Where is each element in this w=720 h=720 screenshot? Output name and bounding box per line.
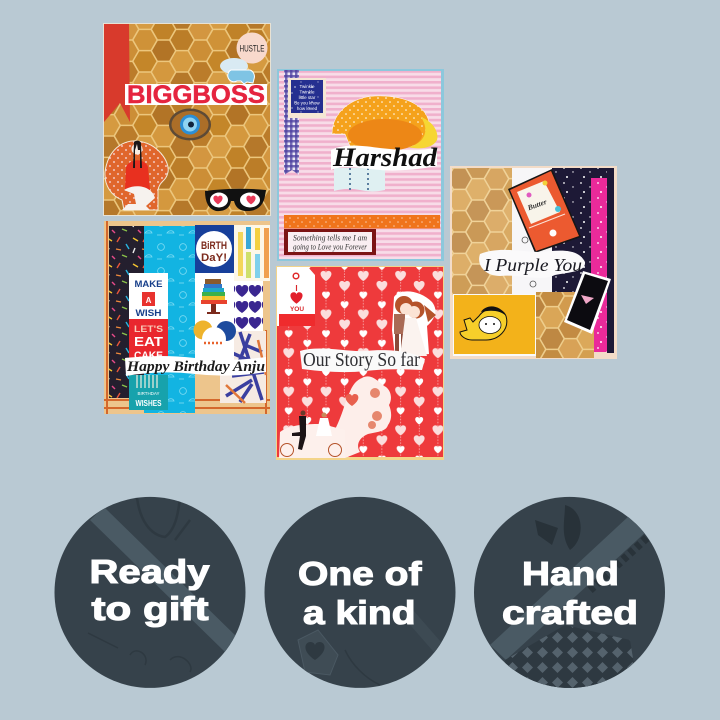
sticker: tree [320,376,391,458]
tag: I love you: YOU [290,306,304,313]
panel: orange music player [508,169,581,253]
sticker: woman in armchair [105,141,168,210]
banner: I Purple You: I Purple You [483,255,582,275]
card: Biggboss [103,23,271,216]
panel: let's eat cake: LET'S [134,324,163,335]
panel: birthday wishes [129,375,168,410]
panel: make a wish: MAKE [134,279,162,290]
panel: let's eat cake: EAT [134,334,163,349]
card: I Purple You [450,166,617,359]
sticker: kissing couple [392,291,436,357]
panel: peach hex paper [452,168,512,295]
panel: love note [284,229,376,255]
panel: love note: Something tells me I am [293,234,367,242]
heading: BIGGBOSS: BIGGBOSS [127,81,265,109]
badge: one of a kind [264,497,456,688]
panel: pastel tabs [234,225,270,281]
panel: leaves [220,331,266,403]
panel: starry night [552,168,614,353]
banner: I Purple You [479,250,585,278]
panel: orange music player: Butter [525,197,548,213]
panel: twinkle note: do you know [294,100,320,106]
badge: ready to gift [54,497,246,688]
panel: twinkle note [288,78,326,118]
badge: hand crafted [474,497,665,700]
badge: hand crafted: Hand [522,555,619,592]
panel: pink glitter strip [591,178,607,352]
panel: black polaroid [564,271,611,334]
heading: Harshad: Harshad [332,143,438,172]
panel: birthday wishes: WISHES [136,399,162,408]
panel: white bandana paper [512,168,554,295]
sticker: orange hat and moon [332,96,437,151]
panel: make a wish: WISH [136,308,162,319]
tag: I love you: I [295,284,298,293]
badge: one of a kind: One of [298,555,423,592]
panel: let's eat cake: CAKE [134,350,163,362]
panel: let's eat cake [129,319,168,362]
gingham ribbon [284,70,299,175]
panel: birthday wishes: BIRTHDAY [138,391,160,396]
badge: one of a kind: a kind [303,594,416,631]
panel: cake and balloons [194,273,236,361]
panel: twinkle note: Twinkle [299,84,315,89]
panel: make a wish [129,273,168,319]
orange band [284,215,440,228]
panel: love note: going to Love you Forever [293,242,368,252]
card: Harshad [277,69,444,261]
panel: navy hearts [234,281,263,331]
card: Happy Birthday Anju [104,221,270,414]
panel: birthday badge: DaY! [201,252,227,264]
badge: ready to gift: to gift [92,590,209,627]
icon: evil eye [169,108,211,140]
sticker: hustle [236,32,268,64]
panel: twinkle note: Twinkle [299,90,315,94]
panel: blue doodles [144,226,195,413]
tag: I love you [277,267,315,326]
banner: Happy Birthday Anju: Happy Birthday Anju [126,359,265,375]
panel: twinkle note: little star [299,95,316,100]
banner: Our Story So far: Our Story So far [303,349,420,371]
icon: speech bubbles [220,58,254,84]
sticker: heart glasses [205,189,266,211]
panel: paper scraps [334,168,385,192]
red ribbon bookmark [104,24,130,122]
sticker: hustle: HUSTLE [240,44,264,54]
sticker: couple on bicycle [279,410,345,458]
panel: sprinkles [109,226,144,398]
panel: birthday badge: BiRTH [201,240,227,252]
badge: ready to gift: Ready [90,553,210,590]
badge: hand crafted: crafted [502,594,638,631]
panel: yellow character card [453,294,536,356]
card: Our Story So far [276,266,444,460]
panel: birthday badge [195,225,234,273]
panel: twinkle note: how loved [297,106,318,111]
panel: lower hex paper [536,292,594,358]
panel: make a wish: A [146,296,152,305]
